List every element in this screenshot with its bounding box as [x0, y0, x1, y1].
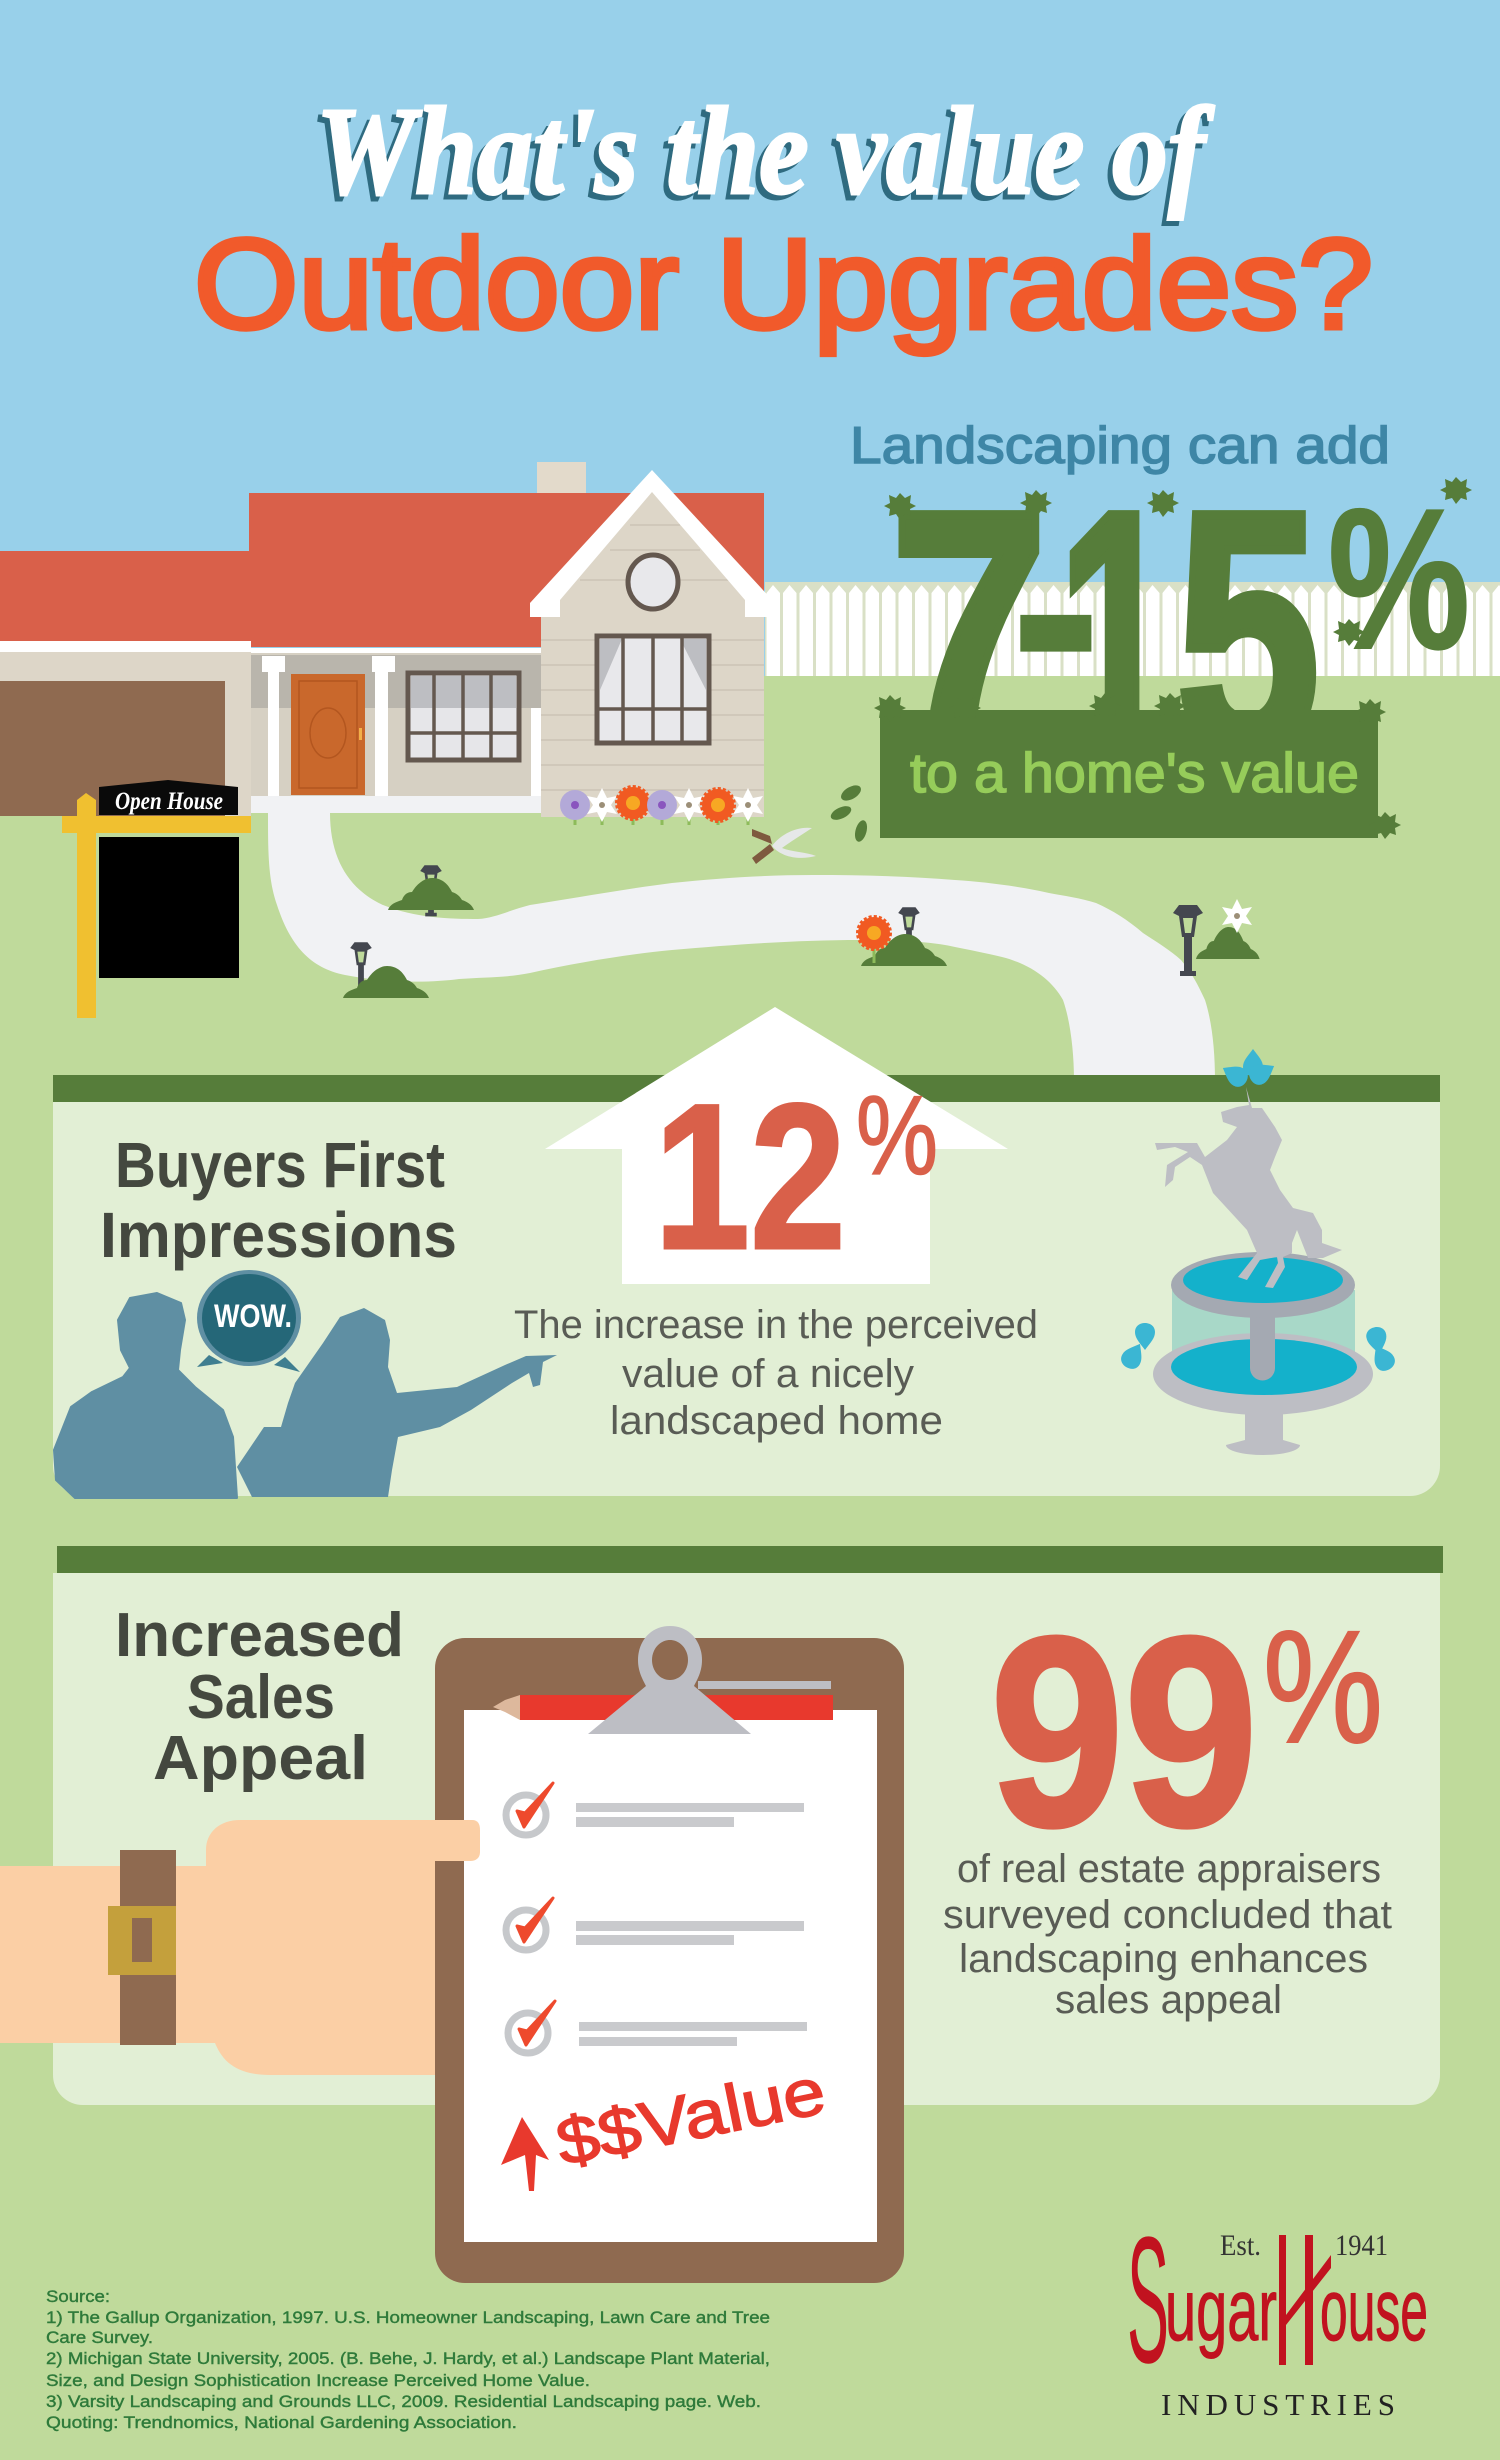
fountain: glass tier [1172, 1290, 1355, 1355]
clipboard board [435, 1638, 904, 2283]
flower bed [560, 787, 763, 825]
fountain: lower basin [1153, 1333, 1373, 1415]
falling leaves [829, 782, 869, 843]
leaf tufts [874, 477, 1472, 839]
picket fence [765, 582, 1500, 676]
description [943, 1847, 1392, 2022]
silhouette: woman pointing [237, 1308, 557, 1497]
house: siding lines [541, 525, 764, 790]
heading [115, 1601, 404, 1793]
fountain: lower water [1171, 1339, 1357, 1395]
house: gable trim [530, 470, 775, 617]
speech bubble: wow [197, 1270, 301, 1372]
shears icon [752, 828, 816, 864]
title: What's the value of: What's the value of [311, 88, 1209, 226]
sign crossbar [62, 816, 251, 833]
sign post [77, 793, 96, 1018]
source notes: 2) Michigan State University, 2005. (B. Behe, J. Hardy, et al.) Landscape Plant Material, [46, 2349, 770, 2368]
lamp, flower and bush 4 [1173, 899, 1260, 976]
watch buckle [108, 1906, 176, 1975]
fountain: column [1250, 1310, 1275, 1380]
checklist row 3 [508, 2001, 807, 2053]
stat number: - [1010, 439, 1102, 775]
house: gable wall [541, 490, 764, 817]
description: landscaped home [610, 1399, 943, 1443]
heading: Appeal [153, 1724, 368, 1793]
logo: H [1279, 2235, 1331, 2365]
logo: Est.: Est. [1220, 2229, 1261, 2262]
title: What's the value of: What's the value of [316, 83, 1214, 221]
silhouette: man [54, 1293, 237, 1498]
lamp and bush 2 [343, 942, 429, 998]
fountain: upper basin [1171, 1252, 1355, 1318]
pencil [493, 1681, 833, 1720]
heading: Impressions [100, 1199, 457, 1271]
panel header bar [57, 1546, 1443, 1573]
up arrow [501, 2117, 549, 2191]
house illustration [0, 462, 775, 825]
house: porch floor [251, 796, 541, 813]
house: garage door [0, 681, 225, 816]
house: round window [628, 555, 678, 609]
house: chimney [537, 462, 586, 495]
checklist row 1 [506, 1783, 804, 1835]
unicorn statue [1155, 1087, 1342, 1288]
stat number: 5 [1176, 441, 1320, 826]
lamp, flower and bush 3 [858, 907, 947, 966]
panel body [53, 1102, 1440, 1496]
clipboard paper [464, 1710, 877, 2242]
clip [588, 1626, 751, 1734]
sign board [99, 837, 239, 978]
source notes: Size, and Design Sophistication Increase Perceived Home Value. [46, 2371, 590, 2390]
plaque [880, 710, 1378, 838]
water drops [1118, 1049, 1398, 1374]
stat 99: 99 [990, 1582, 1258, 1883]
watch strap [120, 1850, 176, 2045]
plaque text: to a home's value [910, 741, 1359, 804]
logo: sugarhouse industries: S [1127, 2200, 1169, 2401]
fountain with unicorn [1118, 1049, 1398, 1455]
white house arrow [545, 1007, 1008, 1284]
heading: Sales [187, 1663, 335, 1732]
heading [100, 1129, 457, 1271]
house: porch shadow [251, 655, 541, 708]
source notes: Care Survey. [46, 2328, 153, 2347]
logo: INDUSTRIES: INDUSTRIES [1161, 2387, 1395, 2422]
house: roof [0, 493, 764, 647]
subheading: Landscaping can add: Landscaping can add [850, 417, 1390, 475]
stat percent sign: % [1263, 1597, 1383, 1776]
panel: buyers first impressions [53, 1007, 1440, 1498]
source notes [46, 2287, 770, 2432]
panel: increased sales appeal [0, 1546, 1443, 2283]
panel header bar [53, 1075, 1440, 1102]
7-15% topiary stat [874, 439, 1472, 839]
sign topper text: Open House [115, 788, 223, 815]
house: main window [597, 636, 709, 743]
stat 12: 12 [654, 1061, 846, 1292]
lamp and bush 1 [388, 865, 474, 916]
value label: $$Value [550, 2053, 831, 2180]
hand: arm and palm [0, 1820, 440, 2075]
sky background [0, 0, 1500, 676]
house: door [291, 674, 365, 795]
source notes: 1) The Gallup Organization, 1997. U.S. Homeowner Landscaping, Lawn Care and Tree [46, 2308, 770, 2327]
title: Outdoor Upgrades?: Outdoor Upgrades? [194, 213, 1373, 356]
stat percent sign: % [856, 1073, 938, 1198]
description: sales appeal [1055, 1978, 1282, 2022]
description: The increase in the perceived [514, 1303, 1038, 1347]
clipboard [435, 1626, 904, 2283]
lawn background [0, 676, 1500, 2460]
heading: Buyers First [115, 1129, 445, 1201]
fountain: upper water [1183, 1257, 1343, 1303]
stat number: 7 [890, 441, 1048, 826]
sign topper [99, 780, 238, 815]
source notes: Quoting: Trendnomics, National Gardening Association. [46, 2413, 517, 2432]
description: surveyed concluded that [943, 1893, 1392, 1937]
house: fascia [0, 641, 541, 653]
house: porch wall [251, 653, 541, 796]
garden path [268, 813, 1215, 1081]
checklist row 2 [506, 1898, 804, 1950]
speech bubble: wow: WOW. [214, 1298, 292, 1334]
house: porch window [408, 673, 519, 760]
hand: pointing finger [400, 1820, 480, 1861]
description: of real estate appraisers [957, 1847, 1381, 1891]
house: porch posts [262, 656, 541, 796]
logo: sugarhouse industries [1127, 2200, 1428, 2422]
stat number [890, 439, 1470, 826]
open house sign [62, 780, 251, 1018]
source notes: Source: [46, 2287, 110, 2306]
description: value of a nicely [622, 1352, 914, 1396]
stat number: 1 [1058, 441, 1176, 826]
heading: Increased [115, 1601, 404, 1670]
logo: ugar: ugar [1165, 2260, 1277, 2359]
fountain: pedestal [1226, 1412, 1300, 1455]
logo: 1941: 1941 [1335, 2229, 1388, 2262]
description: landscaping enhances [959, 1937, 1368, 1981]
panel body [53, 1573, 1440, 2105]
house: garage wall [0, 641, 251, 816]
description [514, 1303, 1038, 1443]
source notes: 3) Varsity Landscaping and Grounds LLC, 2009. Residential Landscaping page. Web. [46, 2392, 761, 2411]
